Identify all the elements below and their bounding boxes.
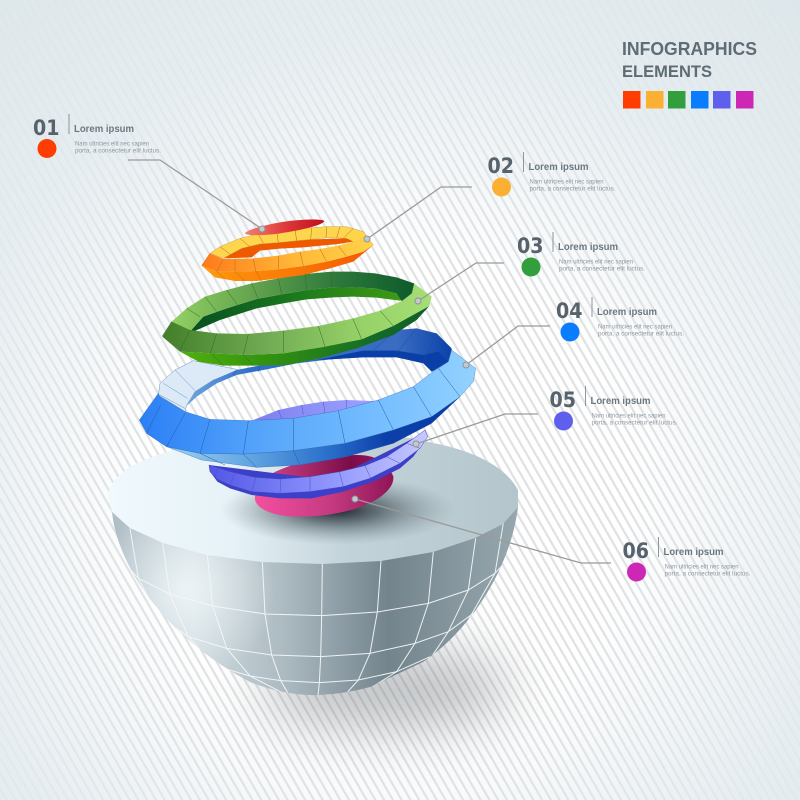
bowl: top surface — [108, 430, 518, 564]
label 03: Lorem ipsum — [558, 241, 618, 253]
label 03 — [517, 232, 645, 276]
label 03: 03 — [517, 234, 544, 258]
label 04: Lorem ipsum — [597, 306, 657, 318]
label 03: porta, a consectetur elit luctus. — [559, 266, 645, 272]
ring 01: red leaf — [245, 220, 324, 235]
heading: INFOGRAPHICS — [622, 39, 757, 59]
ring 05: purple — [209, 400, 428, 498]
label 01: Nam ultricies elit nec sapien — [75, 140, 149, 148]
label 05: Nam ultricies elit nec sapien — [592, 412, 666, 420]
leader line 04 — [463, 326, 550, 368]
label 02: porta, a consectetur elit luctus. — [530, 186, 616, 192]
label 06: Nam ultricies elit nec sapien — [664, 564, 739, 570]
label 05: porta, a consectetur elit luctus. — [592, 420, 678, 426]
label 06: 06 — [622, 539, 649, 563]
label 01 — [33, 114, 161, 158]
leader line 02 — [364, 187, 472, 242]
label 05 — [550, 386, 678, 430]
label 06: Lorem ipsum — [664, 546, 724, 558]
ring 02: orange — [202, 227, 373, 281]
label 02 — [488, 152, 616, 196]
label 02: Nam ultricies elit nec sapien — [530, 178, 604, 186]
label 04: Nam ultricies elit nec sapien — [598, 324, 672, 330]
heading: ELEMENTS — [622, 63, 712, 81]
label 01: 01 — [33, 116, 60, 140]
leader line 03 — [415, 263, 504, 304]
ring 06: magenta — [255, 455, 393, 517]
ring 04: blue — [139, 328, 476, 467]
leader line 01 — [128, 160, 265, 232]
label 02: Lorem ipsum — [528, 161, 588, 173]
bowl: hemisphere — [112, 507, 518, 696]
ring 03: green — [162, 272, 432, 366]
label 06: porta, a consectetur elit luctus. — [664, 570, 751, 578]
shadow under rings — [220, 475, 456, 545]
label 06 — [622, 537, 751, 582]
label 04: porta, a consectetur elit luctus. — [598, 330, 684, 338]
leader line 05 — [413, 414, 538, 447]
label 01: porta, a consectetur elit luctus. — [75, 148, 161, 154]
label 04: 04 — [556, 299, 582, 323]
colour swatches — [623, 91, 754, 108]
bowl ground shadow — [260, 650, 510, 730]
label 03: Nam ultricies elit nec sapien — [559, 258, 633, 266]
label 05: Lorem ipsum — [590, 395, 650, 407]
label 01: Lorem ipsum — [74, 123, 134, 135]
label 04 — [556, 297, 684, 342]
heading — [622, 39, 757, 81]
label 05: 05 — [550, 388, 576, 412]
label 02: 02 — [488, 154, 514, 178]
leader line 06 — [352, 496, 611, 563]
